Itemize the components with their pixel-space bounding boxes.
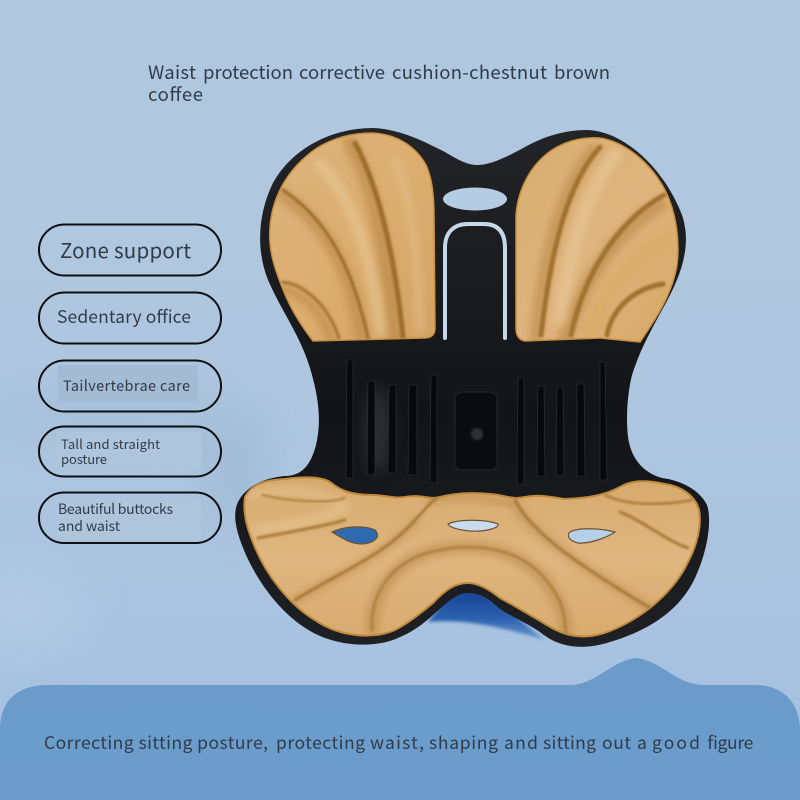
U-shaped slot	[445, 224, 505, 338]
title: corrective	[299, 59, 385, 85]
pill: beautiful buttocks and waist: and waist	[58, 516, 121, 536]
title: cushion-chestnut	[392, 59, 547, 85]
pill: beautiful buttocks and waist: Beautiful buttocks	[58, 499, 173, 519]
pill: zone support	[39, 224, 221, 276]
title	[148, 59, 610, 107]
title: protection	[203, 59, 293, 85]
pill: sedentary office: Sedentary office	[57, 304, 191, 329]
slogan	[44, 730, 753, 755]
right pad shading	[535, 147, 665, 338]
slogan: shaping	[429, 730, 498, 755]
pill: sedentary office	[39, 292, 221, 344]
slogan: a	[637, 730, 647, 755]
pill: beautiful buttocks and waist	[39, 492, 221, 543]
black frame	[235, 128, 709, 647]
oval vent	[443, 188, 507, 210]
slogan: Correcting sitting posture,	[44, 730, 268, 755]
left back pad	[270, 133, 435, 341]
seat pad	[244, 477, 700, 637]
slogan: and	[504, 730, 538, 755]
pill: zone support: Zone support	[60, 234, 191, 264]
title: coffee	[148, 81, 203, 107]
back ribs	[346, 360, 607, 484]
right back pad	[516, 138, 678, 342]
pill: tailvertebrae care	[39, 360, 221, 412]
slogan: good	[652, 730, 700, 755]
left pad shading	[280, 143, 420, 340]
product: posture cushion	[235, 128, 709, 647]
back plate shading	[364, 388, 392, 472]
cushion shadow on the floor	[428, 588, 545, 640]
title: brown	[554, 59, 610, 85]
pill: tall and straight posture	[39, 426, 221, 476]
slogan: figure	[707, 730, 753, 755]
slogan: out	[602, 730, 631, 755]
slogan: sitting	[543, 730, 596, 755]
seat vent holes	[332, 520, 615, 544]
pill: tailvertebrae care: Tailvertebrae care	[63, 375, 190, 396]
slogan: waist,	[370, 730, 424, 755]
title: Waist	[148, 59, 196, 85]
pill: tall and straight posture: posture	[61, 449, 107, 468]
bottom band with wave	[0, 658, 800, 800]
slogan: protecting	[276, 730, 365, 755]
feature pills	[39, 224, 221, 543]
seat creases	[250, 491, 692, 637]
pill: tall and straight posture: Tall and straight	[61, 434, 160, 453]
lumbar panel	[455, 392, 497, 470]
